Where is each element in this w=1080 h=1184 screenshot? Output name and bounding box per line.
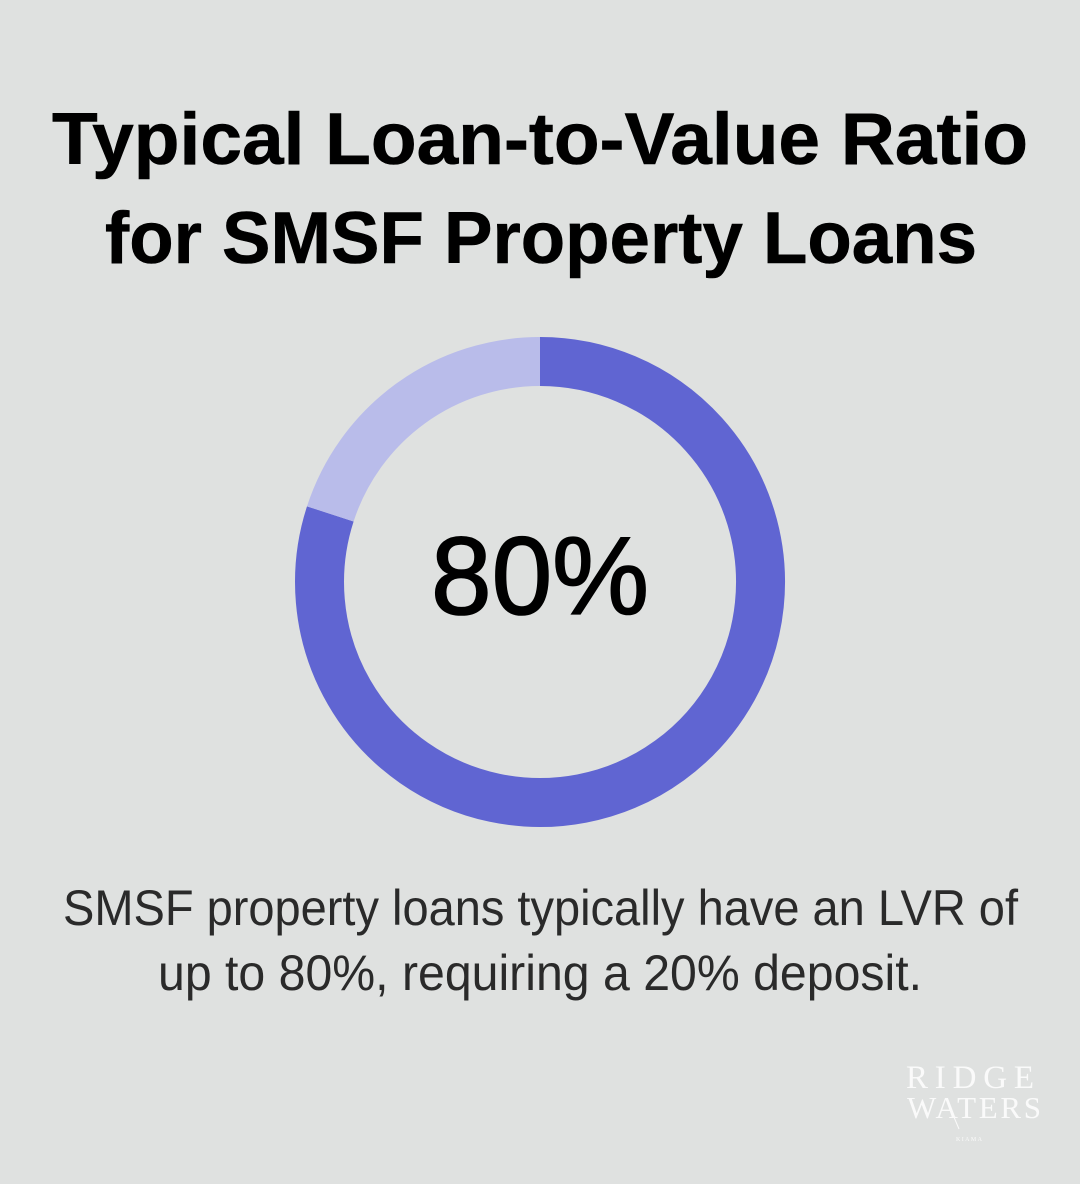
description [63,880,1018,1001]
logo: Ridge Waters Kiama: KIAMA [956,1137,983,1143]
donut segment: 80% loan [320,362,761,802]
description: up to 80%, requiring a 20% deposit. [158,945,922,1001]
logo: Ridge Waters Kiama [906,1060,1041,1143]
donut segment: 20% deposit [330,362,540,514]
logo: Ridge Waters Kiama: RIDGE [906,1060,1034,1096]
logo: Ridge Waters Kiama: WATERS [907,1090,1041,1125]
title [52,99,1028,279]
title: for SMSF Property Loans [105,198,977,279]
description: SMSF property loans typically have an LVR of [63,880,1018,936]
donut value: 80% [431,515,649,638]
donut chart: 80% [320,362,761,802]
title: Typical Loan-to-Value Ratio [52,99,1028,180]
